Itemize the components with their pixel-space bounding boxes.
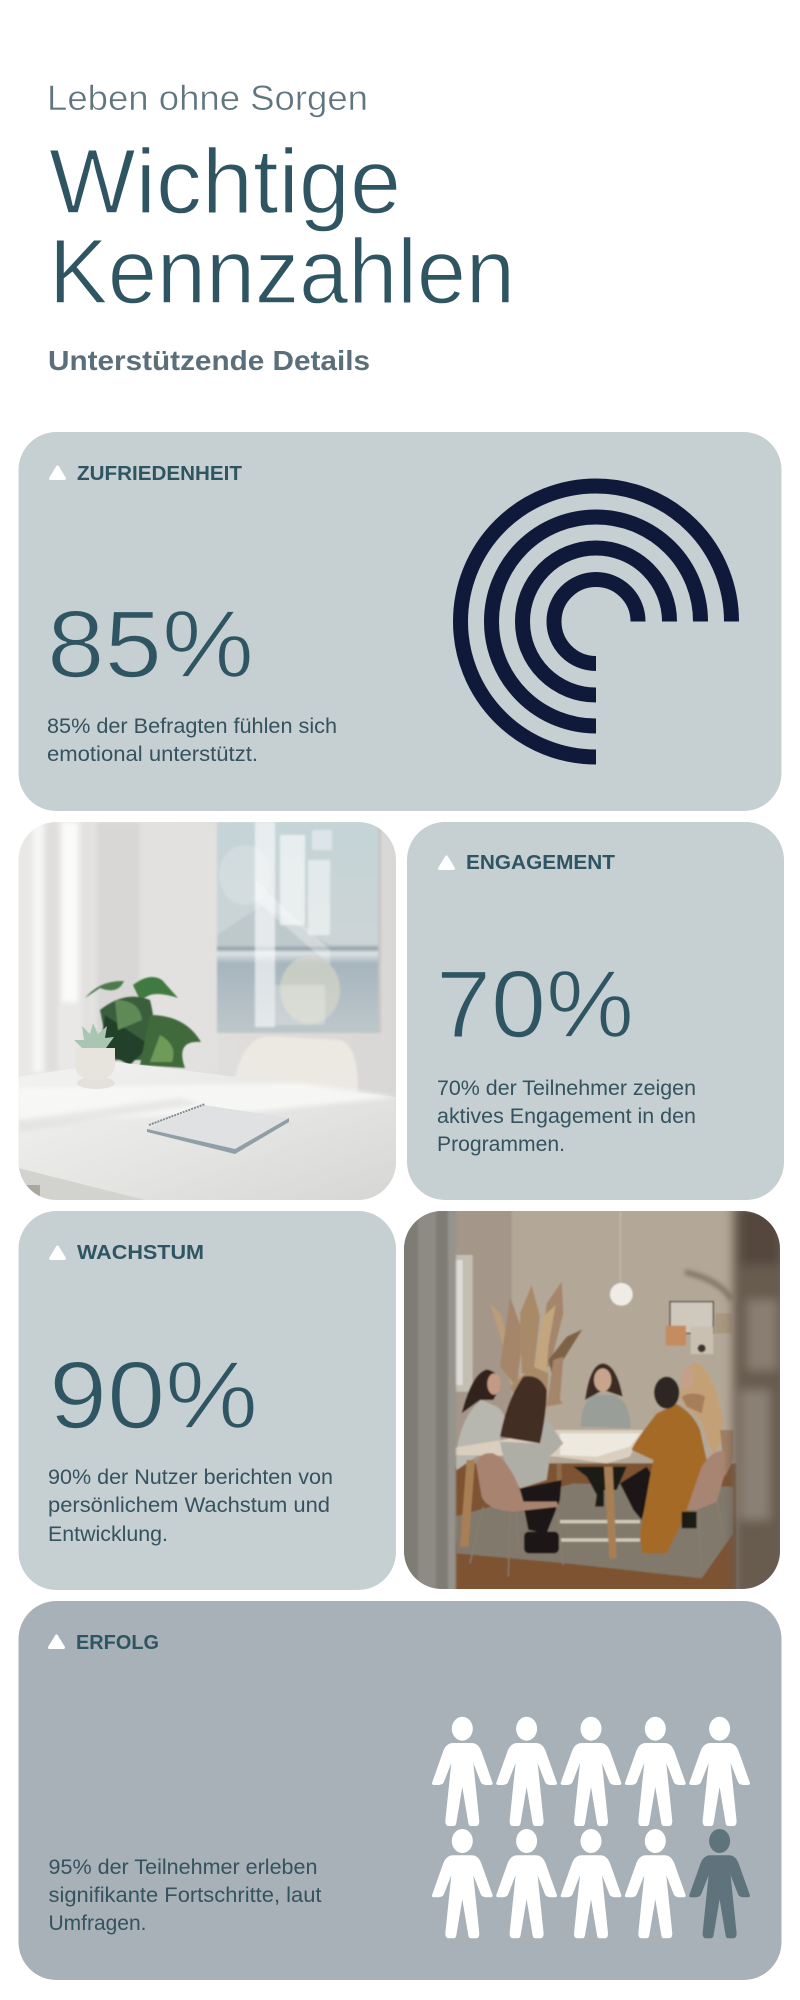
woman front left bbox=[470, 1376, 563, 1577]
woman at right bbox=[680, 1362, 723, 1455]
table bbox=[18, 1062, 396, 1200]
photo: bright desk with plant bbox=[18, 822, 396, 1200]
chair bbox=[236, 1036, 358, 1092]
value: 90% bbox=[49, 1342, 258, 1449]
chair right back bbox=[720, 1430, 733, 1477]
man in ochre coat bbox=[620, 1377, 725, 1567]
title: Wichtige bbox=[49, 131, 401, 233]
value: 70% bbox=[436, 951, 634, 1058]
title bbox=[49, 131, 515, 323]
floor bbox=[450, 1463, 737, 1597]
label: ENGAGEMENT bbox=[466, 852, 615, 874]
description: 85% der Befragten fühlen sich bbox=[47, 715, 337, 738]
description: 95% der Teilnehmer erleben bbox=[48, 1856, 317, 1879]
description bbox=[437, 1077, 696, 1156]
description: signifikante Fortschritte, laut bbox=[48, 1884, 322, 1907]
icon: triangle bbox=[50, 1247, 64, 1258]
description: aktives Engagement in den bbox=[437, 1105, 696, 1128]
panel: Wachstum bbox=[18, 1211, 396, 1590]
chart: concentric arcs bbox=[461, 486, 732, 757]
pot with succulent bbox=[74, 1023, 115, 1089]
plant bbox=[85, 977, 201, 1068]
description: Entwicklung. bbox=[48, 1523, 168, 1546]
panel: Engagement bbox=[407, 822, 784, 1200]
rug bbox=[455, 1483, 733, 1578]
supporting heading: Unterstützende Details bbox=[48, 345, 370, 376]
description: Programmen. bbox=[437, 1133, 565, 1156]
curtain bbox=[32, 822, 138, 1073]
wall pictures bbox=[666, 1302, 732, 1354]
title: Kennzahlen bbox=[49, 221, 515, 323]
pictogram: 9 of 10 people highlighted bbox=[432, 1717, 750, 1938]
label: ZUFRIEDENHEIT bbox=[77, 463, 242, 485]
description bbox=[48, 1466, 333, 1546]
description: emotional unterstützt. bbox=[47, 743, 258, 766]
painting bbox=[217, 822, 381, 1033]
description bbox=[47, 715, 337, 766]
description: 70% der Teilnehmer zeigen bbox=[437, 1077, 696, 1100]
panel: Zufriedenheit bbox=[18, 432, 782, 811]
woman at centre bbox=[573, 1363, 631, 1507]
label: WACHSTUM bbox=[77, 1242, 204, 1264]
icon: triangle bbox=[440, 857, 454, 868]
label: ERFOLG bbox=[76, 1632, 159, 1654]
value: 85% bbox=[47, 591, 254, 698]
blurred plant bbox=[685, 1272, 732, 1300]
description: 90% der Nutzer berichten von bbox=[48, 1466, 333, 1489]
photo: team meeting around table bbox=[404, 1211, 780, 1589]
woman at left bbox=[455, 1369, 505, 1470]
subtitle: Leben ohne Sorgen bbox=[47, 79, 368, 118]
blurred foreground right bbox=[733, 1205, 788, 1597]
window bbox=[455, 1254, 474, 1392]
description: persönlichem Wachstum und bbox=[48, 1494, 330, 1517]
icon: triangle bbox=[50, 1636, 64, 1648]
description: Umfragen. bbox=[48, 1912, 146, 1935]
notebook bbox=[147, 1104, 289, 1154]
pendant lamp bbox=[610, 1212, 633, 1306]
pampas grass bbox=[490, 1282, 582, 1407]
blurred foreground left bbox=[404, 1211, 458, 1589]
table bbox=[450, 1430, 643, 1558]
panel: Erfolg bbox=[18, 1601, 782, 1980]
wall bbox=[400, 1207, 800, 1597]
description bbox=[48, 1856, 322, 1935]
icon: triangle bbox=[50, 467, 64, 478]
